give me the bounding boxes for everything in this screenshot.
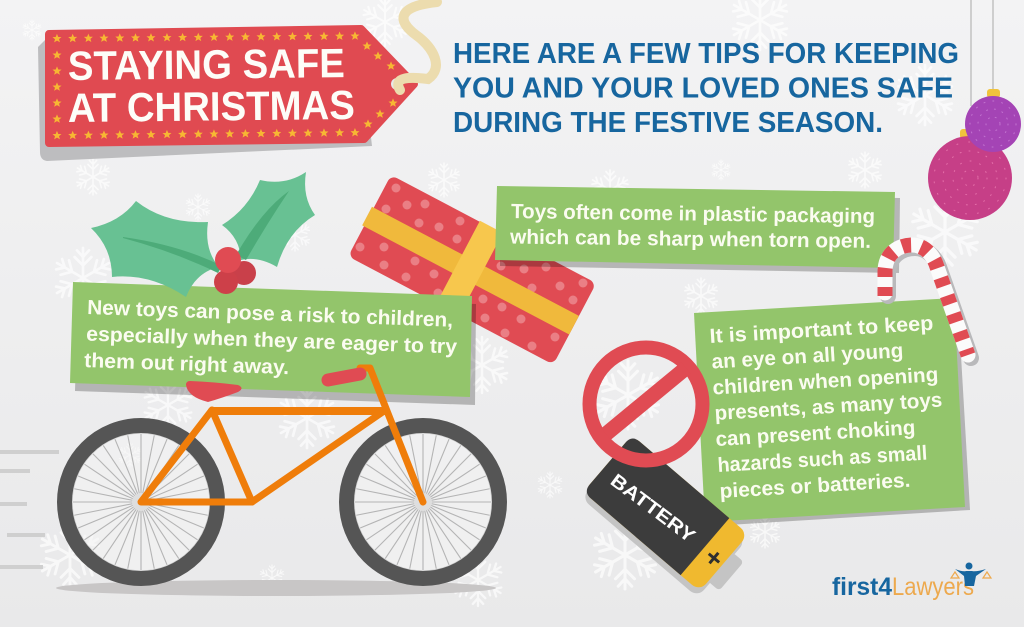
callout: box 2 plastic packaging: which can be sharp when torn open. [509,225,871,253]
purple bauble [965,89,1021,152]
bike frame [141,368,423,502]
heading: DURING THE FESTIVE SEASON. [453,107,883,139]
gift polka dots [356,184,588,350]
callout: box 2 plastic packaging [495,186,900,273]
logo: first4lawyers: Lawyers [892,573,974,601]
ground shadow [56,580,496,596]
callout: box 3 choking hazards: It is important to keep [709,312,934,348]
icon: candy cane [885,245,971,358]
tag shadow [38,40,372,161]
callout: box 3 choking hazards: pieces or batteries. [719,469,911,503]
title text: AT CHRISTMAS [68,82,355,131]
icon: prohibition sign [590,348,702,460]
battery shadow and terminal [581,441,755,605]
battery label: BATTERY [606,470,699,547]
title text: STAYING SAFE [68,40,345,89]
callout: box 3 choking hazards: presents, as many toys [714,389,943,425]
pink bauble [928,129,1012,220]
callout: box 3 choking hazards: hazards such as small [717,442,928,477]
tag stars [52,31,397,139]
title tag [38,2,437,161]
heading: YOU AND YOUR LOVED ONES SAFE [453,72,953,104]
callout: box 1 new toys: especially when they are eager to try [86,323,458,358]
battery plus sign: + [698,541,730,575]
gift ribbons [346,173,597,365]
tag string [398,2,437,90]
callout: box 3 choking hazards: an eye on all young [711,339,904,373]
heading: HERE ARE A FEW TIPS FOR KEEPING [453,38,959,70]
logo figure with scales [951,562,991,586]
title text [68,40,355,131]
callout: box 3 choking hazards: children when opening [712,363,939,399]
holly leaf right [222,172,315,267]
icon: gift box [346,173,597,365]
callout: box 3 choking hazards [694,298,970,526]
callout: box 1 new toys: New toys can pose a risk to children, [87,296,453,332]
tag hole [391,78,403,90]
callout: box 1 new toys: them out right away. [84,349,290,379]
holly leaf left [91,201,219,297]
tag body [49,29,414,143]
logo wordmark: first4 [832,573,892,601]
icon: bicycle [64,368,500,578]
rear wheel [64,426,218,578]
front wheel [346,426,500,578]
holly berries [214,247,256,294]
battery body [583,435,748,591]
icon: holly [91,172,315,297]
holly veins [123,191,289,273]
callout: box 3 choking hazards: can present choking [715,416,916,451]
heading [453,38,959,139]
speed lines [0,452,59,567]
logo: first4lawyers [832,562,991,601]
bike handlebar grip [328,374,360,380]
callout: box 1 new toys [70,282,476,405]
callout: box 2 plastic packaging: Toys often come in plastic packaging [511,200,875,228]
bike seat [186,381,242,402]
hanging baubles [928,0,1021,220]
icon: battery [581,435,755,605]
